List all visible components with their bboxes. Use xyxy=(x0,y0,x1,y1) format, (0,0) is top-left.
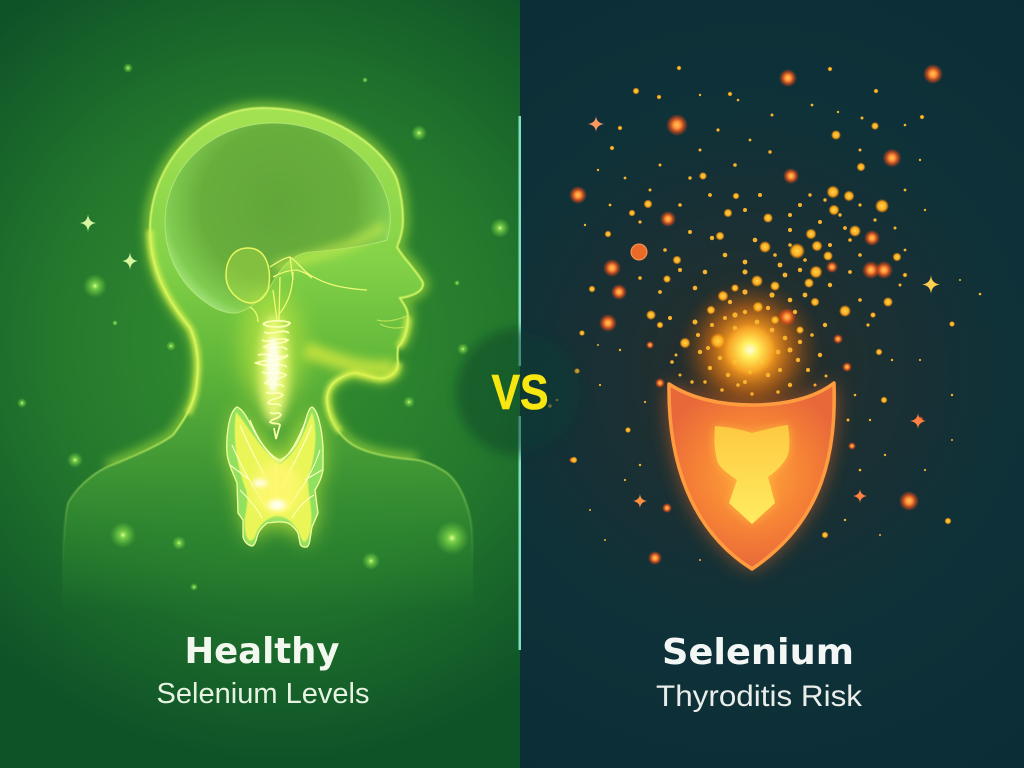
lips xyxy=(377,316,407,328)
pituitary ring xyxy=(226,248,269,303)
mid gold particles xyxy=(570,66,955,538)
subheading: Selenium Levels: Selenium Levels xyxy=(156,678,370,710)
silhouette inner glow band xyxy=(150,230,408,432)
nerve lines xyxy=(250,257,367,322)
thyroid yellow wings xyxy=(235,412,315,542)
shield glow xyxy=(669,383,834,569)
heading: Healthy: Healthy xyxy=(184,631,340,672)
figure: glowing human head and shoulders xyxy=(62,108,473,610)
thyroid lobe texture xyxy=(230,420,322,518)
green glowing particles xyxy=(17,63,510,591)
subheading: Thyroditis Risk: Thyroditis Risk xyxy=(656,680,863,713)
jaw glow xyxy=(305,350,395,369)
glowing brain underside xyxy=(275,225,385,268)
particle burst core xyxy=(678,278,822,422)
neck core glow xyxy=(240,290,304,410)
centre divider line xyxy=(518,116,521,650)
thyroid glow xyxy=(227,407,323,547)
inner brain shell xyxy=(165,123,390,313)
small gold particles xyxy=(548,94,981,561)
orange sparkle stars xyxy=(588,116,940,508)
heading: Selenium: Selenium xyxy=(662,632,854,673)
spine glow xyxy=(259,315,289,425)
thyroid bright centre xyxy=(260,494,294,516)
outer aura xyxy=(107,108,423,467)
bright burst centre xyxy=(724,324,776,376)
silhouette outline xyxy=(62,108,473,600)
shield emblem xyxy=(714,425,789,524)
spine bright core xyxy=(266,337,280,393)
green sparkle stars xyxy=(80,214,138,270)
shield xyxy=(669,383,834,569)
solid orange disc xyxy=(631,244,647,260)
panel: healthy background xyxy=(0,0,520,768)
spine vertebrae xyxy=(256,321,290,439)
thyroid highlight xyxy=(253,479,267,487)
thyroid butterfly xyxy=(227,407,323,547)
VS badge: VS xyxy=(492,366,548,420)
shield body xyxy=(669,383,834,569)
thyroid central glow xyxy=(253,462,301,514)
shield emblem glow xyxy=(714,425,789,524)
panel: risk background xyxy=(520,0,1024,768)
head and shoulders silhouette xyxy=(62,108,473,610)
large orange particles xyxy=(569,64,943,565)
VS badge xyxy=(456,328,580,456)
